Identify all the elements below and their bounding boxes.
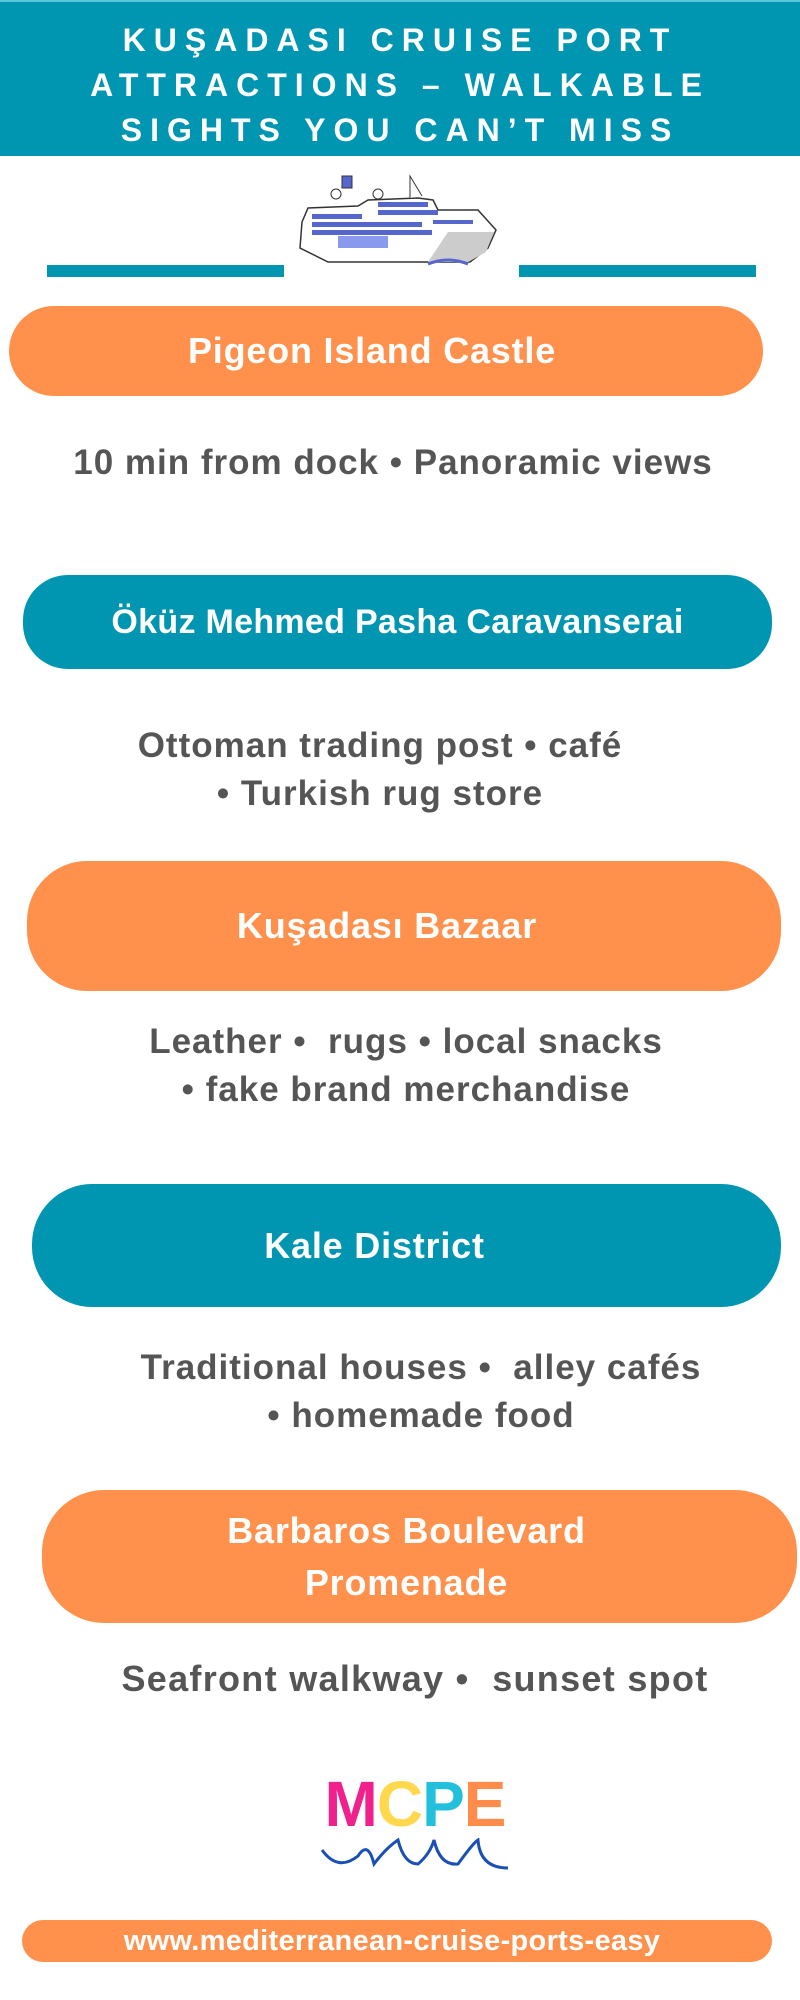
text: caravanserai details: Ottoman trading post • café — [138, 726, 622, 765]
text: kale details: • homemade food — [267, 1396, 575, 1435]
text: caravanserai details: • Turkish rug store — [217, 774, 543, 813]
pill: Barbaros Boulevard — [42, 1490, 797, 1623]
title — [90, 22, 710, 148]
text: kale details — [141, 1348, 701, 1435]
pill: Bazaar: Kuşadası Bazaar — [237, 905, 537, 946]
text: bazaar details: • fake brand merchandise — [182, 1070, 630, 1109]
text: promenade details: Seafront walkway • sunset spot — [121, 1658, 709, 1699]
title: KUŞADASI CRUISE PORT — [123, 22, 677, 58]
text: castle details: 10 min from dock • Panoramic views — [73, 443, 713, 482]
footer url pill — [22, 1920, 772, 1962]
text: bazaar details — [149, 1022, 663, 1109]
pill: Kale District — [32, 1184, 781, 1307]
footer url pill: www.mediterranean-cruise-ports-easy — [124, 1925, 660, 1957]
divider bar right — [519, 265, 756, 277]
icon: cruise ship — [299, 174, 497, 266]
logo: MCPE — [320, 1768, 508, 1870]
pill: Caravanserai: Öküz Mehmed Pasha Caravanserai — [111, 603, 684, 641]
pill: Pigeon Island Castle: Pigeon Island Castle — [188, 330, 556, 371]
pill: Bazaar — [27, 861, 781, 991]
title: ATTRACTIONS – WALKABLE — [90, 67, 710, 103]
text: bazaar details: Leather • rugs • local snacks — [149, 1022, 663, 1061]
pill: Caravanserai — [23, 575, 772, 669]
text: caravanserai details — [138, 726, 622, 813]
text: kale details: Traditional houses • alley cafés — [141, 1348, 701, 1387]
pill: Kale District: Kale District — [264, 1224, 485, 1266]
divider bar left — [47, 265, 284, 277]
pill: Pigeon Island Castle — [9, 306, 763, 396]
logo: MCPE: MCPE — [325, 1768, 505, 1840]
pill: Barbaros Boulevard: Promenade — [305, 1562, 508, 1602]
header banner — [0, 0, 800, 156]
pill: Barbaros Boulevard: Barbaros Boulevard — [227, 1510, 586, 1550]
title: SIGHTS YOU CAN’T MISS — [121, 112, 679, 148]
